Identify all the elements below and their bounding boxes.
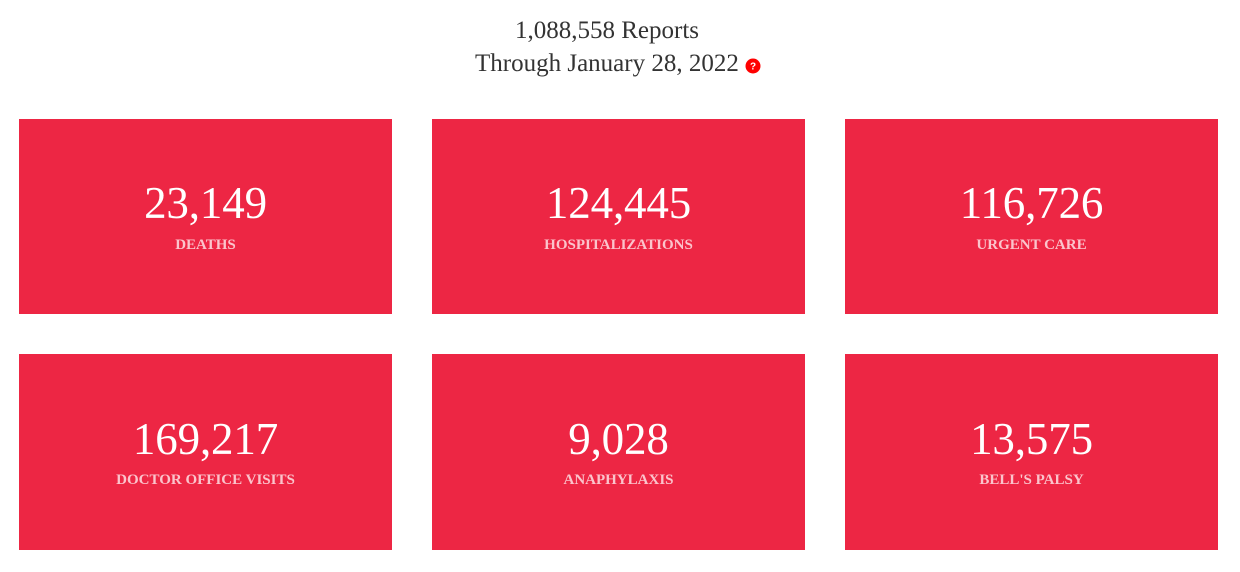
title	[475, 17, 760, 77]
label: BELL'S PALSY	[979, 472, 1084, 488]
value: 23,149	[144, 178, 267, 228]
panel: hospitalizations	[432, 119, 805, 314]
panel: anaphylaxis	[432, 354, 805, 550]
panel: bell's palsy	[845, 354, 1218, 550]
report count: 1,088,558 Reports	[515, 17, 699, 44]
value: 169,217	[133, 414, 278, 464]
icon: help: ?	[750, 62, 756, 72]
panel: doctor office visits	[19, 354, 392, 550]
panel: deaths	[19, 119, 392, 314]
panel: urgent care	[845, 119, 1218, 314]
value: 9,028	[568, 414, 669, 464]
value: 13,575	[970, 414, 1093, 464]
label: DOCTOR OFFICE VISITS	[116, 472, 295, 488]
date line: Through January 28, 2022	[475, 50, 739, 77]
label: DEATHS	[175, 237, 236, 253]
label: ANAPHYLAXIS	[563, 472, 674, 488]
value: 116,726	[960, 178, 1103, 228]
label: URGENT CARE	[976, 237, 1087, 253]
label: HOSPITALIZATIONS	[544, 237, 693, 253]
icon: help	[746, 58, 760, 74]
value: 124,445	[546, 178, 691, 228]
